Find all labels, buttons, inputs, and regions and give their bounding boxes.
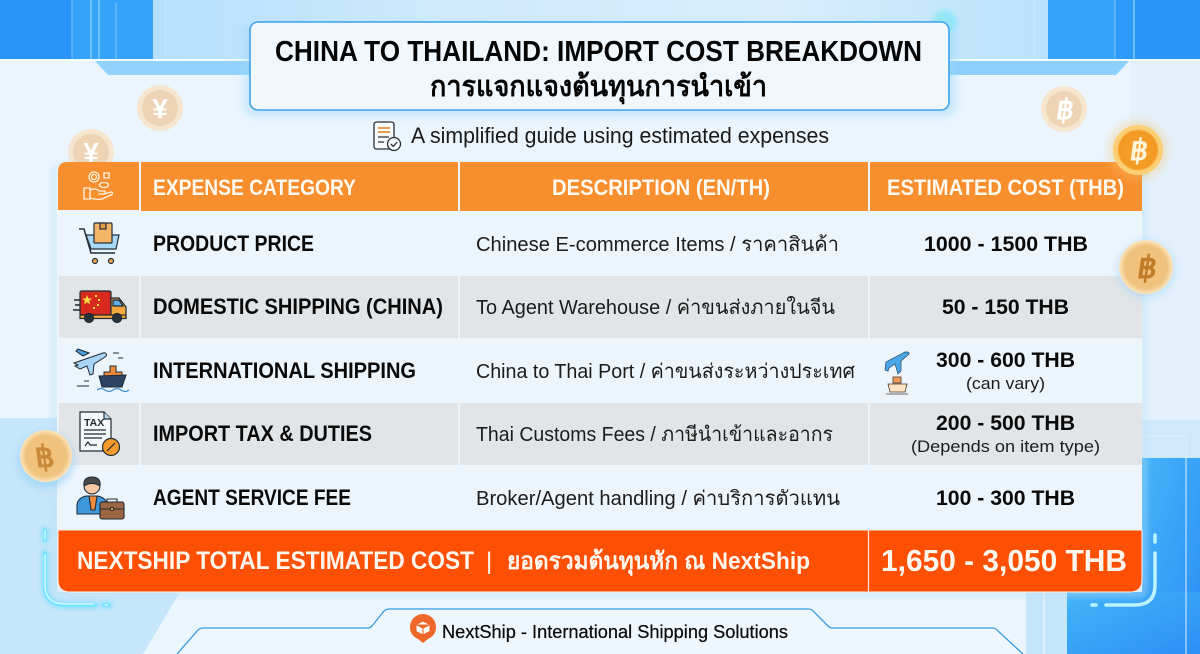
- coin: baht left: [18, 430, 74, 488]
- total label Thai: ยอดรวมต้นทุนหัก ณ NextShip: [507, 548, 810, 577]
- cost: 200 - 500 THB: [936, 412, 1075, 435]
- category: DOMESTIC SHIPPING (CHINA): [153, 294, 443, 319]
- icon: small plane: [885, 352, 909, 374]
- neon bracket right: [1092, 535, 1155, 605]
- cost note: (Depends on item type): [911, 437, 1100, 456]
- row: domestic shipping: [59, 276, 1142, 338]
- faded coin: baht top right: [1041, 86, 1087, 132]
- faded coin: yen behind table: [68, 129, 114, 175]
- icon: agent with briefcase: [77, 477, 124, 519]
- cost: 50 - 150 THB: [942, 296, 1069, 319]
- faded coin: yen top: [137, 85, 183, 131]
- faded coin: yen top: ¥: [152, 93, 168, 124]
- coin: baht left: ฿: [33, 441, 57, 474]
- description: China to Thai Port / ค่าขนส่งระหว่างประเทศ: [476, 361, 855, 383]
- icon: shopping cart: [79, 223, 119, 264]
- coin: baht orange top right: [1108, 120, 1168, 180]
- neon bracket left: [45, 530, 109, 605]
- description: Thai Customs Fees / ภาษีนำเข้าและอากร: [476, 424, 833, 446]
- icon: plane and ship: [74, 349, 129, 392]
- divider bar: |: [486, 548, 492, 575]
- description: Chinese E-commerce Items / ราคาสินค้า: [476, 234, 839, 256]
- icon: tax document: TAX: [84, 417, 104, 429]
- icon: hand with coins: [84, 172, 112, 199]
- icon: delivery truck with flag: [73, 291, 126, 322]
- cost: 300 - 600 THB: [936, 349, 1075, 372]
- coin: baht right: ฿: [1135, 250, 1160, 285]
- total label: NEXTSHIP TOTAL ESTIMATED COST: [77, 547, 474, 575]
- category: INTERNATIONAL SHIPPING: [153, 358, 416, 383]
- logo: [410, 614, 436, 643]
- cost: 100 - 300 THB: [936, 487, 1075, 510]
- table: [50, 162, 1148, 598]
- category: AGENT SERVICE FEE: [153, 485, 351, 510]
- icon: checklist document: [374, 122, 400, 150]
- row: agent service fee: [77, 477, 1075, 519]
- coin: baht orange top right: ฿: [1128, 135, 1151, 167]
- header: expense category: EXPENSE CATEGORY: [153, 175, 356, 200]
- description: To Agent Warehouse / ค่าขนส่งภายในจีน: [476, 296, 835, 319]
- category: IMPORT TAX & DUTIES: [153, 421, 372, 446]
- category: PRODUCT PRICE: [153, 231, 314, 256]
- title: Thai: การแจกแจงต้นทุนการนำเข้า: [430, 71, 767, 104]
- subtitle text: A simplified guide using estimated expenses: [411, 123, 829, 148]
- header: description: DESCRIPTION (EN/TH): [552, 175, 770, 200]
- icon: tax document: [80, 412, 120, 456]
- subtitle: [374, 122, 829, 150]
- faded coin: baht top right: ฿: [1054, 94, 1076, 125]
- total row: [58, 530, 1142, 592]
- total value: 1,650 - 3,050 THB: [881, 543, 1127, 578]
- footer: [177, 609, 1023, 654]
- row: international shipping: [74, 349, 1075, 394]
- title box: [244, 10, 957, 116]
- row: product price: [79, 223, 1088, 264]
- cost note: (can vary): [966, 374, 1045, 393]
- coin: baht right: [1117, 240, 1175, 298]
- faded coin: yen behind table: ¥: [83, 137, 99, 168]
- table header: [58, 162, 1142, 211]
- icon: small ship: [886, 377, 908, 394]
- title: English: CHINA TO THAILAND: IMPORT COST BREAKDOWN: [275, 36, 922, 68]
- cost: 1000 - 1500 THB: [924, 233, 1088, 256]
- description: Broker/Agent handling / ค่าบริการตัวแทน: [476, 488, 840, 510]
- footer text: NextShip - International Shipping Solutions: [442, 622, 788, 642]
- footer frame: [177, 609, 1023, 654]
- header: estimated cost: ESTIMATED COST (THB): [887, 175, 1124, 200]
- row: import tax: [59, 403, 1142, 465]
